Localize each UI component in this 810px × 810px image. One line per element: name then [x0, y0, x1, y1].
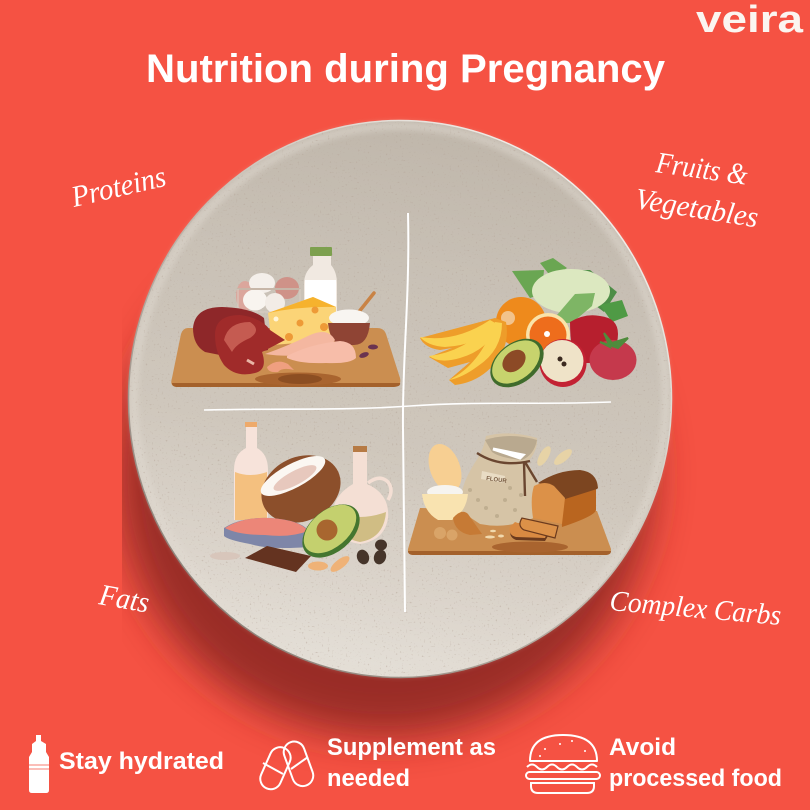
footer item: avoid processed food: processed food: [609, 765, 782, 792]
chocolate bar: [245, 546, 311, 572]
footer item: supplement as needed: Supplement as: [327, 734, 496, 761]
glass jug: [332, 446, 391, 544]
cabbage leaf: [557, 293, 595, 323]
baguette: [422, 439, 468, 497]
cutting board: [408, 508, 611, 555]
peanuts: [308, 553, 352, 575]
logo: veira: veira: [696, 0, 804, 41]
icon: capsules: [257, 739, 316, 793]
food group: fats: [210, 422, 391, 575]
oil bottle: [234, 422, 268, 520]
shrimp: [267, 362, 294, 372]
plate divider: vertical: [403, 213, 408, 612]
food group: fruits and vegetables: [420, 258, 636, 397]
dark beans: [355, 540, 388, 566]
flour sack: [461, 433, 541, 526]
coconut: [250, 443, 352, 535]
flour label: FLOUR: [486, 476, 508, 485]
orange slice: [526, 313, 570, 357]
footer item: avoid processed food: Avoid: [609, 734, 676, 761]
wheat: [535, 444, 574, 468]
label: Fruits & Vegetables: Vegetables: [633, 182, 761, 234]
tomato: [590, 333, 636, 380]
label: Fruits & Vegetables: [633, 146, 761, 234]
label: Fats: Fats: [96, 578, 152, 620]
cookies: [434, 527, 458, 540]
plate shadow: [122, 321, 678, 762]
milk bottle: [304, 247, 337, 322]
icon: water bottle: [29, 735, 49, 793]
footer item: avoid processed food: [526, 734, 782, 793]
footer item: stay hydrated: [29, 735, 224, 793]
label: Complex Carbs: Complex Carbs: [608, 585, 783, 632]
bowl of flour: [422, 485, 468, 520]
food group: complex carbs: [408, 433, 611, 555]
salmon steak: [224, 518, 308, 548]
cutting board: [171, 328, 400, 387]
title: Nutrition during Pregnancy: [146, 47, 666, 91]
beans: [358, 344, 378, 359]
label: Fruits & Vegetables: Fruits &: [653, 146, 750, 192]
icon: burger: [526, 735, 600, 793]
plate: [128, 120, 672, 678]
leaves: [512, 258, 628, 322]
orange: [496, 297, 546, 347]
footer item: supplement as needed: [257, 734, 496, 793]
avocado: [481, 329, 553, 397]
cauliflower: [532, 269, 610, 313]
eggs in glass bowl: [236, 273, 300, 313]
bananas: [420, 318, 507, 385]
plate divider: horizontal: [204, 402, 611, 410]
chicken breasts: [265, 332, 356, 363]
bread slices: [510, 518, 558, 541]
salt: [210, 552, 240, 560]
grains: [485, 530, 504, 538]
footer item: supplement as needed: needed: [327, 765, 410, 792]
cream cheese bowl: [328, 293, 374, 345]
croissant: [453, 512, 482, 535]
apple half: [540, 339, 586, 387]
cheese: [268, 297, 336, 345]
meat: [193, 307, 285, 374]
bread loaf: [532, 470, 598, 527]
red apple: [570, 315, 618, 363]
avocado half: [292, 494, 370, 568]
label: Proteins: Proteins: [67, 160, 169, 214]
footer item: stay hydrated: Stay hydrated: [59, 748, 224, 775]
food group: proteins: [171, 247, 400, 387]
